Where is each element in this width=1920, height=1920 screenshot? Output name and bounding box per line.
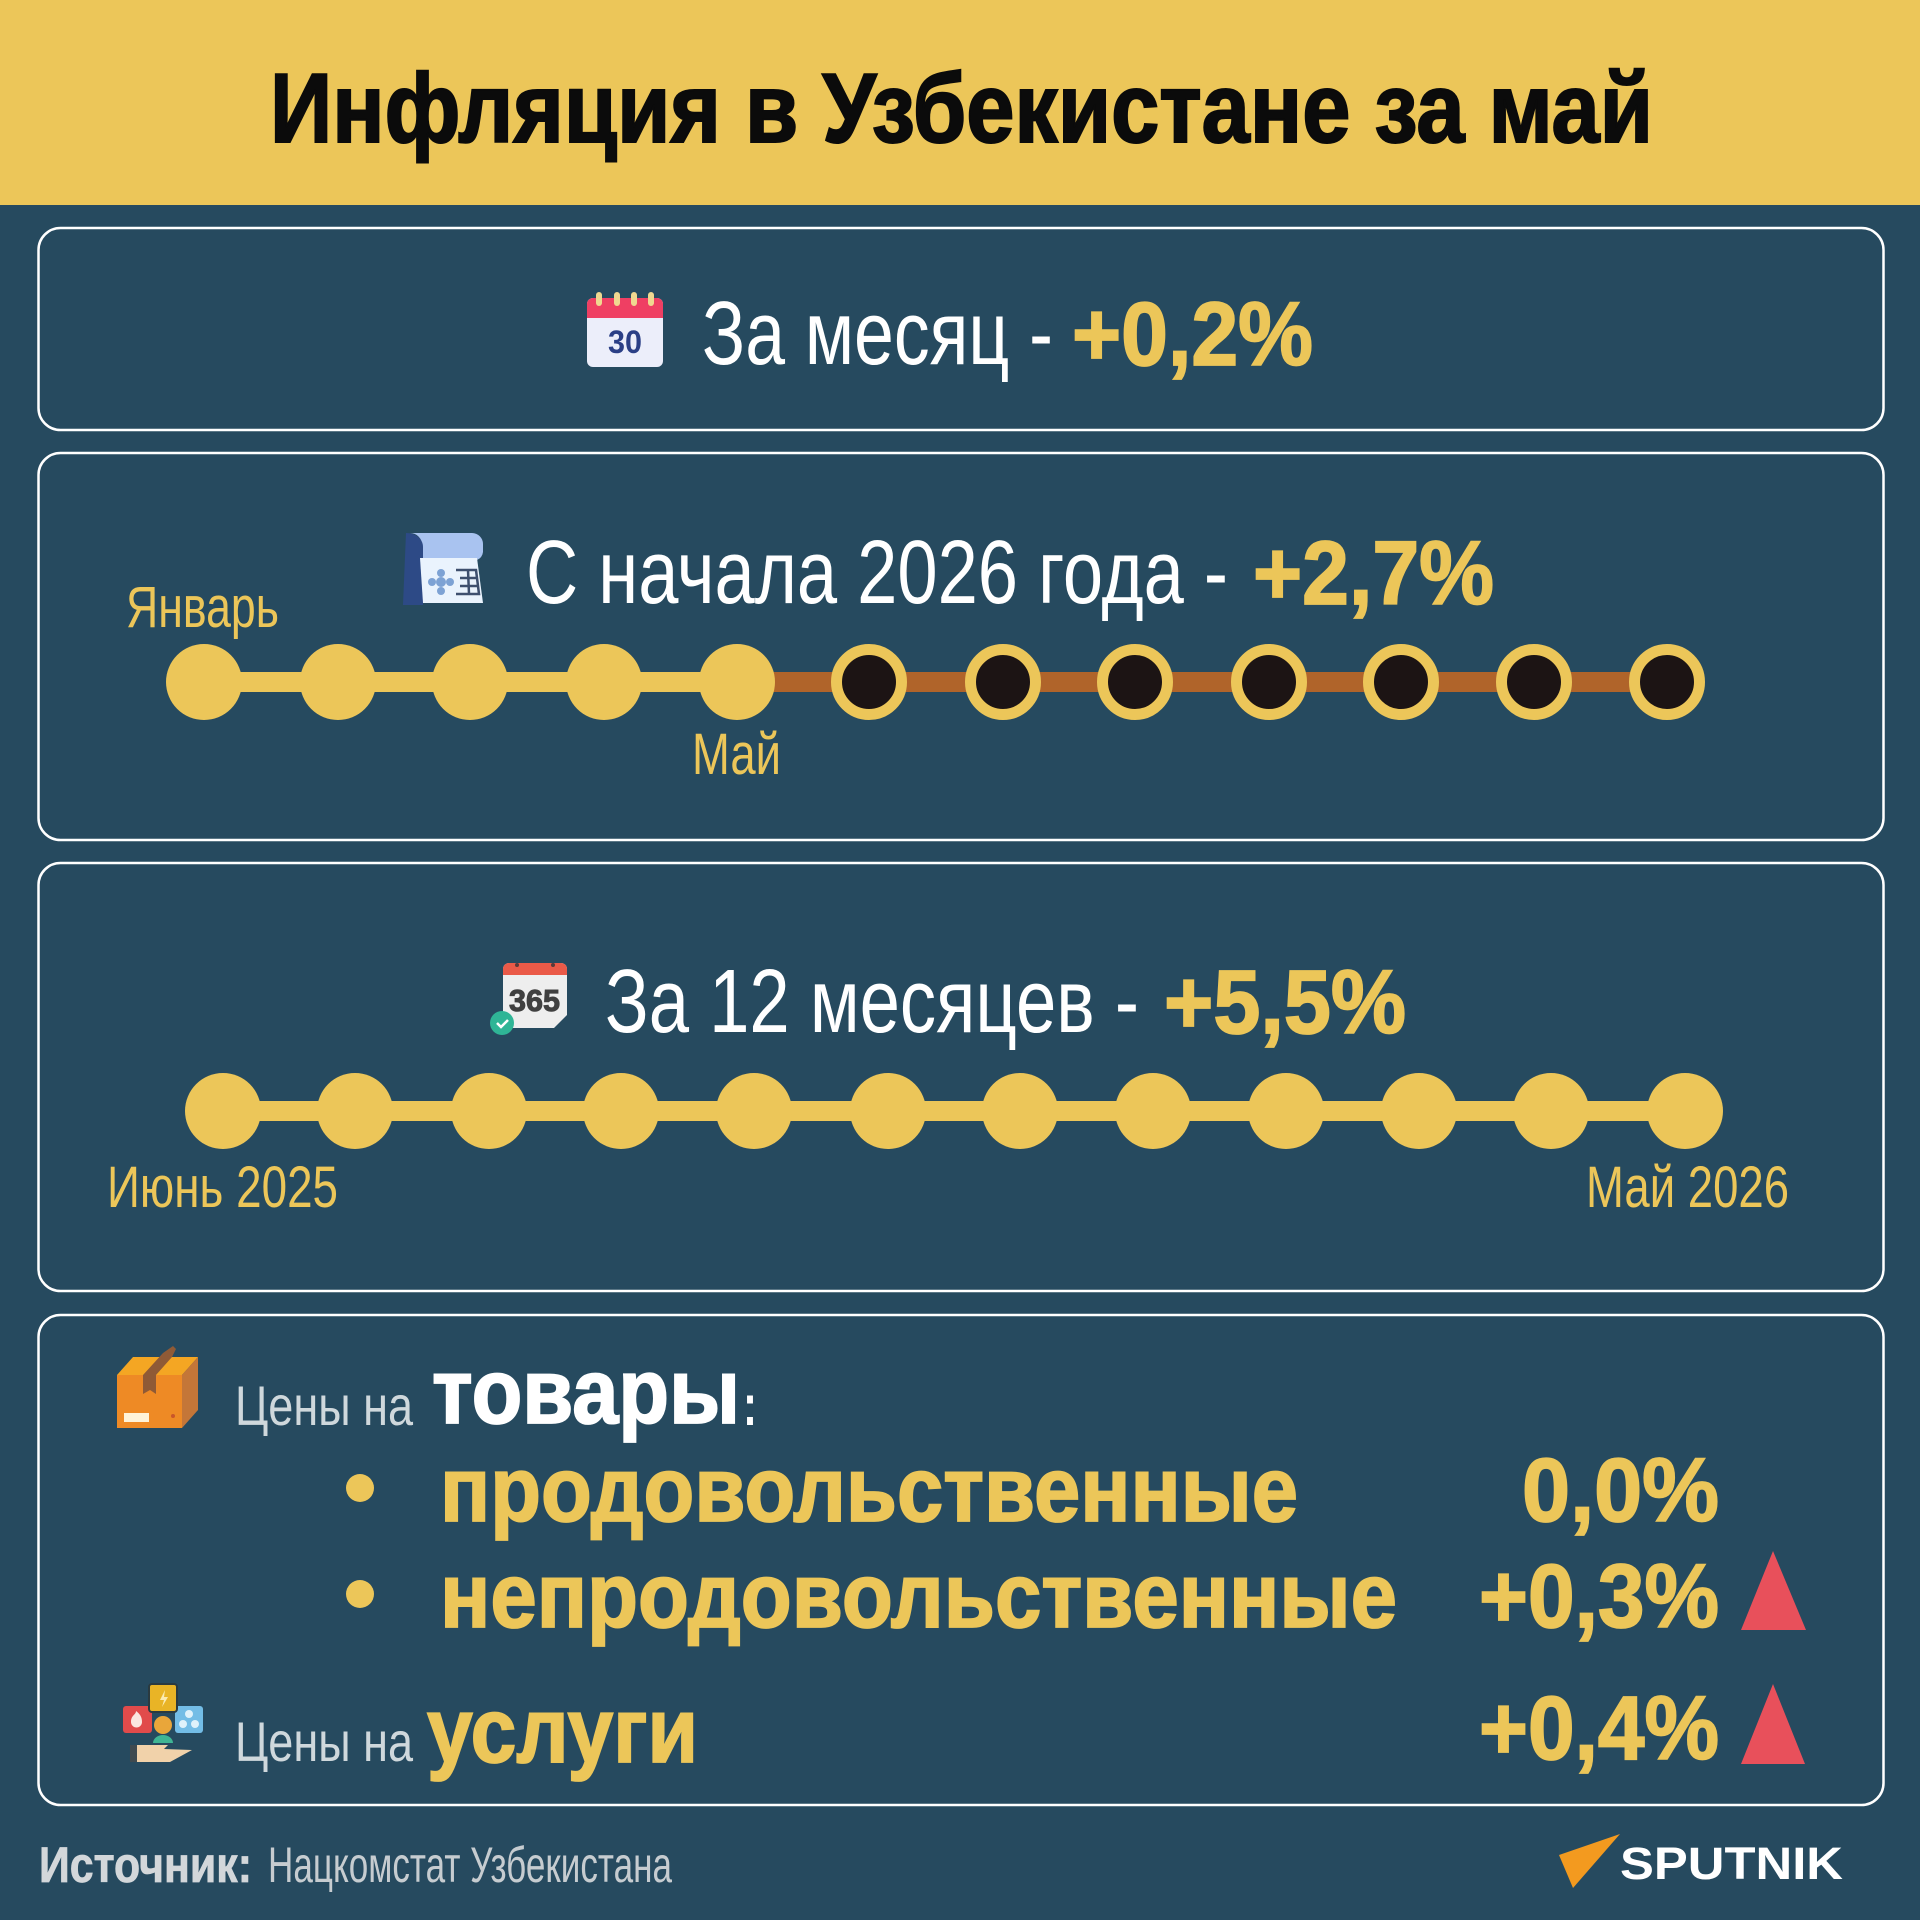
- monthly label: За месяц -: [702, 284, 1053, 384]
- row: non-food goods: непродовольственные: [440, 1545, 1397, 1647]
- row: non-food goods: +0,3%: [1479, 1547, 1719, 1647]
- services heading: goods: товары: [432, 1341, 740, 1443]
- year value: +2,7%: [1253, 524, 1494, 624]
- row: services: услуги: [427, 1680, 698, 1782]
- icon: calendar 365: 365: [509, 983, 560, 1018]
- icon: utilities: [123, 1684, 203, 1762]
- icon: cardboard box: [117, 1346, 198, 1428]
- icon: calendar 365: [490, 963, 567, 1035]
- timeline: June 2025 to May 2026: [185, 1073, 1723, 1149]
- 12 months label: За 12 месяцев -: [605, 952, 1139, 1052]
- logo: Sputnik: [1559, 1834, 1844, 1889]
- panel: monthly inflation: [38, 228, 1884, 430]
- icon: calendar 30: 30: [608, 324, 642, 360]
- header band: [0, 0, 1920, 205]
- row: food goods: [346, 1439, 1719, 1541]
- timeline: January to December: [166, 644, 1700, 720]
- row: food goods: продовольственные: [440, 1439, 1298, 1541]
- monthly value: +0,2%: [1072, 285, 1313, 385]
- panel: since start of year: [38, 453, 1884, 840]
- row: services: [235, 1679, 1805, 1782]
- label: May: Май: [692, 722, 781, 787]
- panel: 12 months: [38, 863, 1884, 1291]
- row: services: +0,4%: [1479, 1679, 1719, 1779]
- services heading: goods: Цены на: [235, 1374, 414, 1437]
- label: May 2026: Май 2026: [1586, 1155, 1789, 1220]
- panel: prices: [38, 1315, 1884, 1805]
- row: food goods: 0,0%: [1522, 1441, 1719, 1541]
- services heading: goods: [235, 1341, 757, 1443]
- source line: Источник:: [39, 1837, 252, 1893]
- logo: Sputnik: SPUTNIK: [1620, 1838, 1844, 1889]
- 12 months value: +5,5%: [1164, 953, 1406, 1053]
- label: January: Январь: [126, 575, 279, 640]
- services heading: goods: :: [743, 1373, 757, 1438]
- label: June 2025: Июнь 2025: [107, 1155, 338, 1220]
- icon: calendar scroll: [403, 533, 483, 605]
- row: services: Цены на: [235, 1710, 414, 1773]
- source line: Нацкомстат Узбекистана: [268, 1837, 672, 1893]
- year label: С начала 2026 года -: [526, 523, 1228, 623]
- icon: calendar 30: [587, 292, 663, 367]
- source line: [39, 1837, 672, 1893]
- title: Инфляция в Узбекистане за май: [270, 53, 1653, 163]
